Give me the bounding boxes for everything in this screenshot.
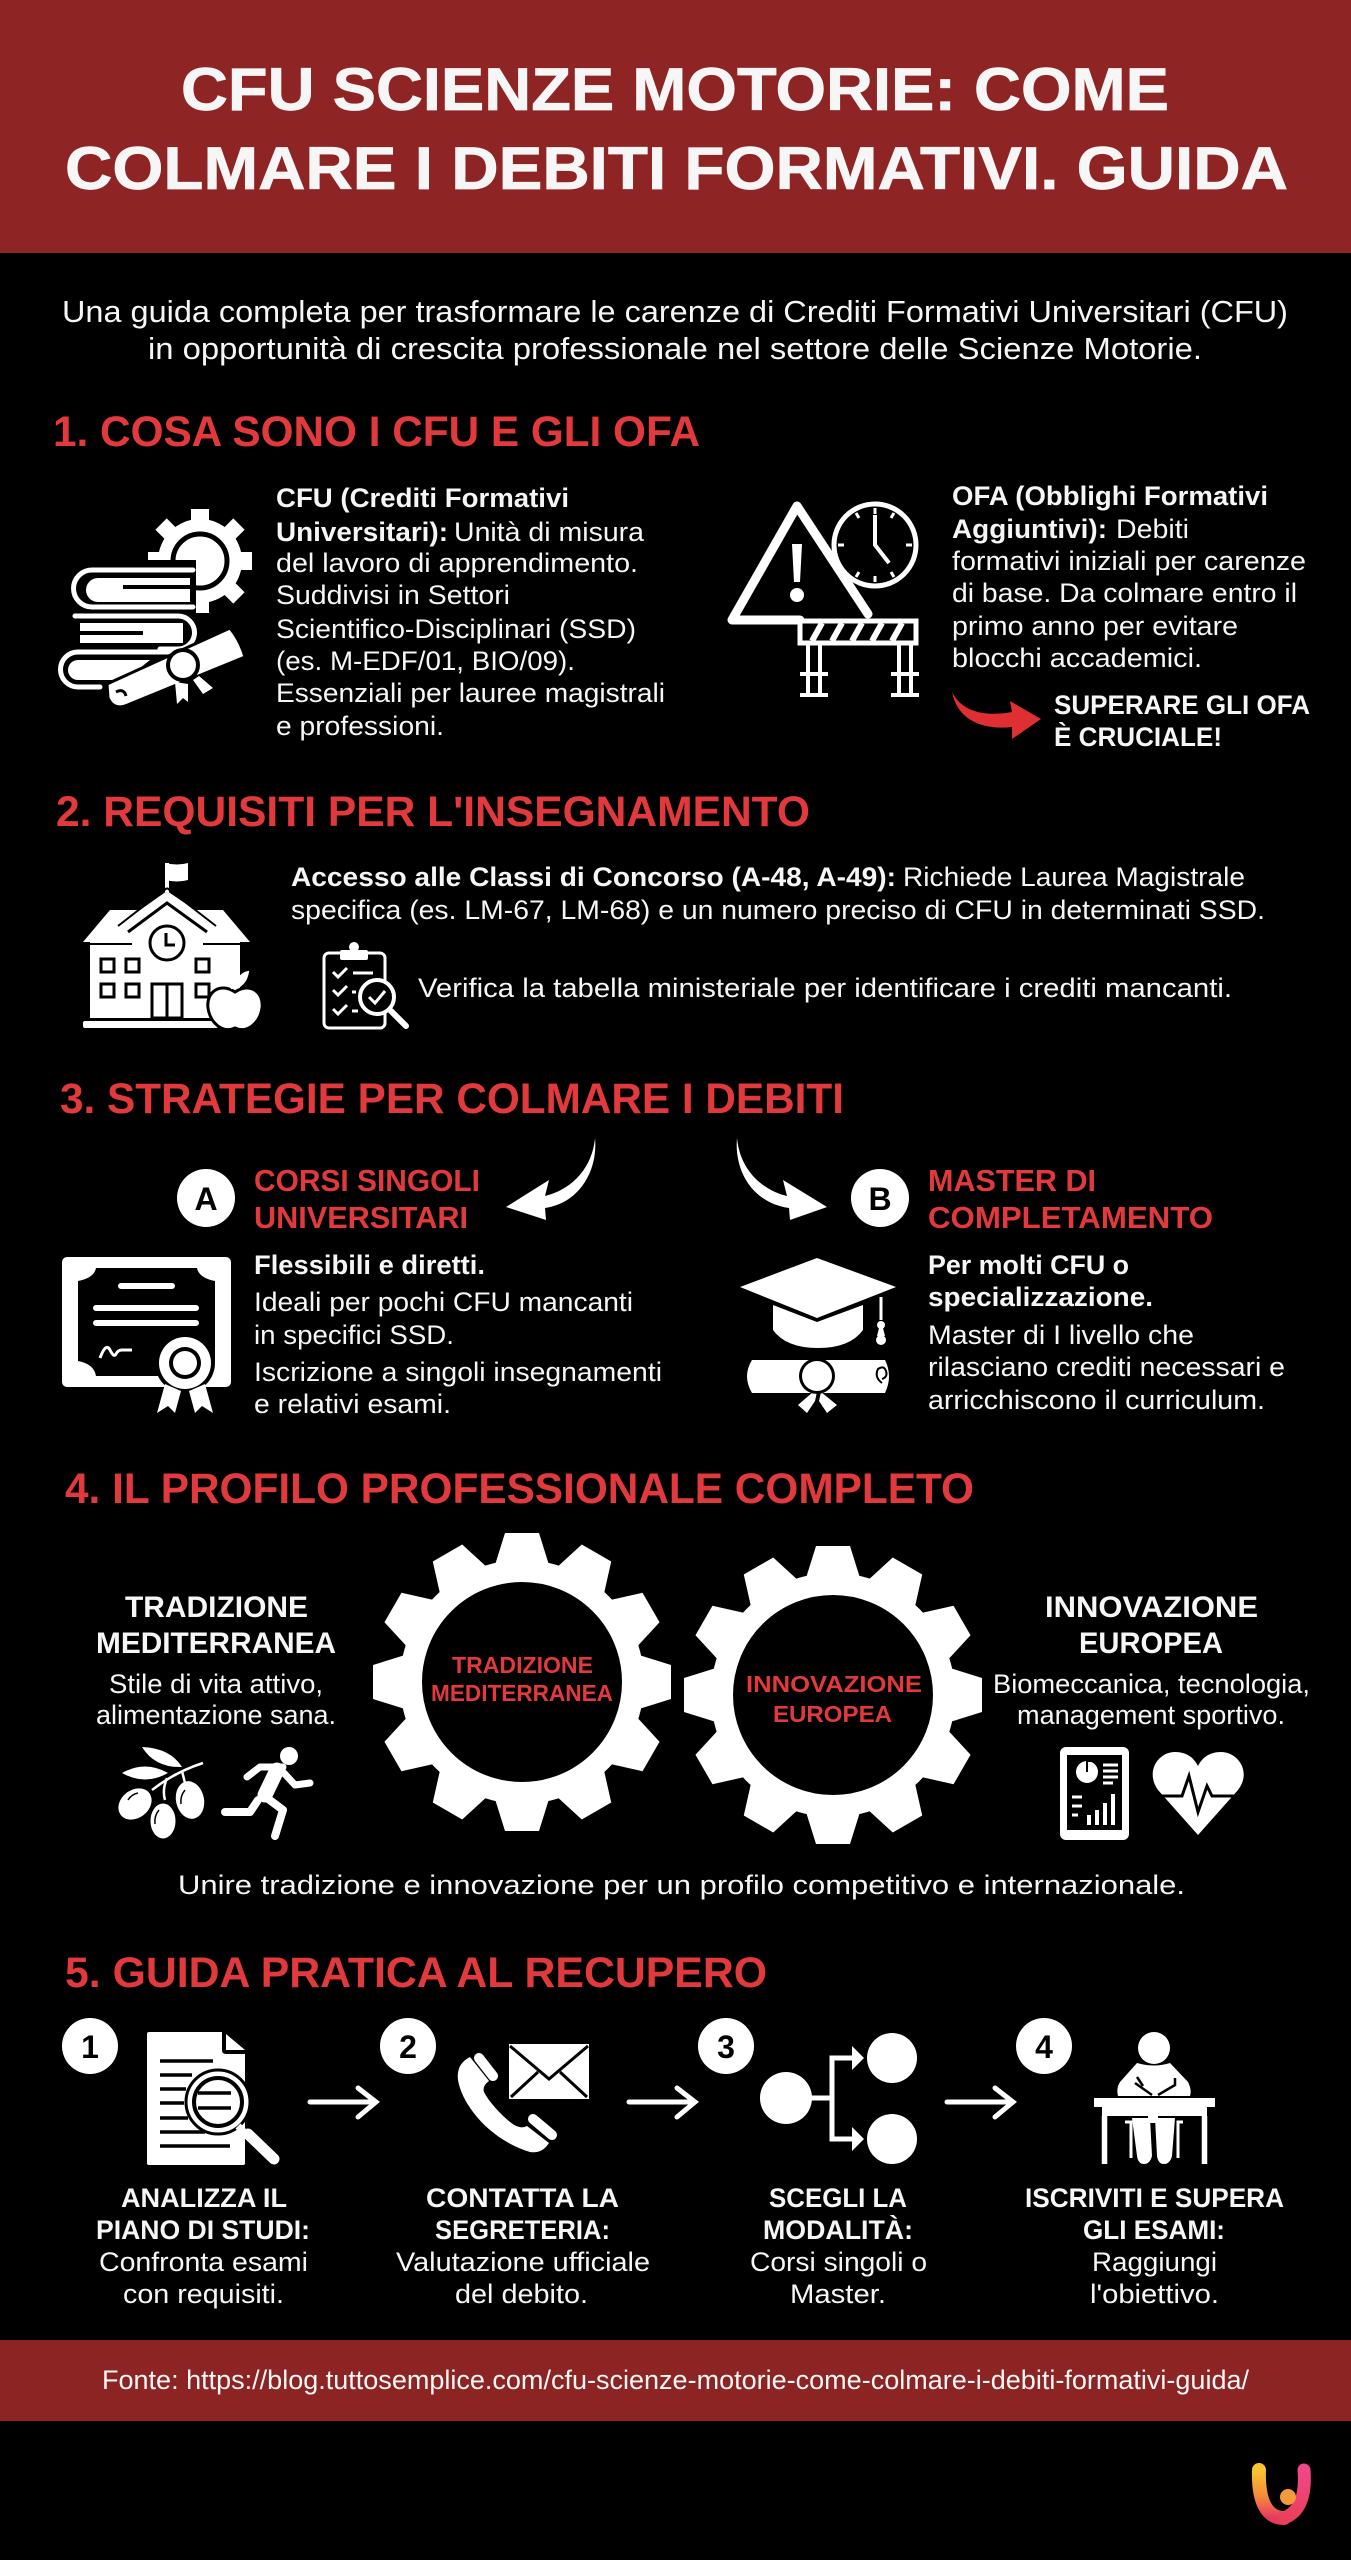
CFU text block [276,483,665,741]
step 1 text: PIANO DI STUDI: [96,2215,310,2245]
section 4 heading: 4. IL PROFILO PROFESSIONALE COMPLETO [65,1465,974,1513]
footer source banner [0,2340,1351,2421]
option B text: arricchiscono il curriculum. [928,1385,1265,1415]
innovation text: INNOVAZIONE [1045,1591,1258,1624]
arrow: to option A [506,1138,595,1220]
title [65,56,1288,202]
requirements text: Accesso alle Classi di Concorso (A-48, A-49): [291,862,896,892]
option B heading: B [868,1181,892,1217]
option A text: Iscrizione a singoli insegnamenti [254,1357,662,1387]
step 3 badge [698,2018,754,2074]
tradition text: alimentazione sana. [96,1700,336,1730]
OFA text block: primo anno per evitare [952,611,1238,641]
footer source banner: Fonte: https://blog.tuttosemplice.com/cfu-scienze-motorie-come-colmare-i-debiti-formativi-guida/ [102,2365,1249,2395]
step 3 badge: 3 [717,2029,735,2065]
CFU text block: CFU (Crediti Formativi [276,483,569,513]
step 2 text: CONTATTA LA [426,2183,619,2213]
CFU text block: Universitari): [276,517,448,547]
icon: branching choice [760,2033,917,2164]
innovation text: management sportivo. [1017,1700,1285,1730]
step 3 text [750,2183,927,2309]
step 3 text: SCEGLI LA [769,2183,907,2213]
CFU text block: e professioni. [276,711,444,741]
OFA text block [952,481,1306,673]
option B text [928,1250,1285,1415]
innovation text: EUROPEA [1079,1627,1223,1660]
option A text: Ideali per pochi CFU mancanti [254,1287,633,1317]
step 4 badge [1016,2018,1072,2074]
option A text [254,1250,662,1419]
step 1 badge: 1 [81,2029,99,2065]
option B text: Per molti CFU o [928,1250,1129,1280]
requirements text [291,862,1265,925]
arrow: step 2 to 3 [629,2088,695,2117]
header banner [0,0,1351,253]
icon: runner [225,1747,310,1836]
gear: innovazione: INNOVAZIONE [746,1671,922,1697]
step 1 badge [62,2018,118,2074]
icon: tablet with charts [1060,1747,1129,1840]
title: CFU SCIENZE MOTORIE: COME [181,56,1169,123]
tradition text: Stile di vita attivo, [109,1669,323,1699]
verification note: Verifica la tabella ministeriale per identificare i crediti mancanti. [418,973,1232,1003]
OFA text block: Aggiuntivi): [952,514,1107,544]
option A heading [177,1163,480,1235]
gear: innovazione [684,1546,982,1844]
section 3 heading: 3. STRATEGIE PER COLMARE I DEBITI [60,1075,844,1123]
step 2 badge: 2 [399,2029,417,2065]
step 4 badge: 4 [1035,2029,1053,2065]
requirements text: Richiede Laurea Magistrale [903,862,1245,892]
arrow: to option B [737,1138,827,1220]
gear: innovazione: EUROPEA [773,1701,892,1727]
innovation text [993,1591,1310,1730]
OFA text block: Debiti [1116,514,1189,544]
intro text [62,294,1288,366]
title: COLMARE I DEBITI FORMATIVI. GUIDA [65,135,1288,202]
step 4 text [1025,2183,1284,2309]
option B heading: COMPLETAMENTO [928,1200,1213,1235]
icon: warning, clock and barrier [732,504,919,695]
option A heading: UNIVERSITARI [254,1200,468,1235]
intro text: in opportunità di crescita professionale nel settore delle Scienze Motorie. [148,331,1202,366]
option A heading: A [194,1181,218,1217]
step 3 text: Corsi singoli o [750,2247,927,2277]
callout: superare gli OFA [1054,690,1310,752]
section 2 heading: 2. REQUISITI PER L'INSEGNAMENTO [56,788,810,836]
icon: checklist with magnifier [324,942,406,1028]
CFU text block: Unità di misura [454,517,645,547]
callout: superare gli OFA: SUPERARE GLI OFA [1054,690,1310,720]
requirements text: specifica (es. LM-67, LM-68) e un numero preciso di CFU in determinati SSD. [291,895,1265,925]
icon: olive branch [112,1747,208,1839]
step 1 text: Confronta esami [99,2247,308,2277]
option A heading: CORSI SINGOLI [254,1163,480,1198]
step 2 badge [380,2018,436,2074]
step 4 text: ISCRIVITI E SUPERA [1025,2183,1284,2213]
arrow: step 1 to 2 [310,2088,376,2117]
icon: school with apple [83,863,262,1030]
CFU text block: Scientifico-Disciplinari (SSD) [276,614,636,644]
logo [1259,2470,1304,2518]
icon: phone and envelope [458,2044,589,2152]
step 2 text: Valutazione ufficiale [396,2247,650,2277]
CFU text block: (es. M-EDF/01, BIO/09). [276,646,575,676]
OFA text block: di base. Da colmare entro il [952,578,1297,608]
option B text: rilasciano crediti necessari e [928,1352,1285,1382]
arrow: step 3 to 4 [947,2088,1013,2117]
CFU text block: del lavoro di apprendimento. [276,548,638,578]
icon: student at desk [1094,2032,1215,2164]
step 2 text: del debito. [455,2279,588,2309]
step 4 text: l'obiettivo. [1090,2279,1219,2309]
option A text: e relativi esami. [254,1389,451,1419]
summary sentence: Unire tradizione e innovazione per un profilo competitivo e internazionale. [178,1870,1185,1900]
option A text: in specifici SSD. [254,1320,454,1350]
option B text: specializzazione. [928,1282,1153,1312]
option B heading: MASTER DI [928,1163,1096,1198]
gear: tradizione [373,1533,671,1831]
OFA text block: formativi iniziali per carenze [952,546,1306,576]
gear: tradizione: TRADIZIONE [452,1652,593,1678]
CFU text block: Essenziali per lauree magistrali [276,678,665,708]
option A text: Flessibili e diretti. [254,1250,485,1280]
intro text: Una guida completa per trasformare le carenze di Crediti Formativi Universitari (CFU) [62,294,1288,329]
CFU text block: Suddivisi in Settori [276,580,510,610]
step 3 text: Master. [790,2279,886,2309]
step 2 text [396,2183,650,2309]
step 1 text: con requisiti. [123,2279,284,2309]
section 5 heading: 5. GUIDA PRATICA AL RECUPERO [65,1949,767,1997]
section 1 heading: 1. COSA SONO I CFU E GLI OFA [53,408,700,456]
icon: document with magnifier [147,2032,274,2165]
step 1 text [96,2183,310,2309]
OFA text block: OFA (Obblighi Formativi [952,481,1268,511]
step 2 text: SEGRETERIA: [435,2215,610,2245]
option B text: Master di I livello che [928,1320,1194,1350]
step 4 text: GLI ESAMI: [1083,2215,1225,2245]
tradition text: MEDITERRANEA [96,1627,336,1660]
icon: books, gear and diploma [60,509,252,707]
OFA text block: blocchi accademici. [952,643,1202,673]
option B heading [851,1163,1213,1235]
gear: tradizione: MEDITERRANEA [431,1680,613,1706]
arrow: red curved [952,692,1041,739]
innovation text: Biomeccanica, tecnologia, [993,1669,1310,1699]
step 4 text: Raggiungi [1092,2247,1217,2277]
icon: certificate [62,1257,231,1413]
step 3 text: MODALITÀ: [763,2214,913,2245]
icon: heart with pulse [1153,1752,1244,1835]
tradition text: TRADIZIONE [125,1591,308,1624]
callout: superare gli OFA: È CRUCIALE! [1054,721,1222,752]
icon: graduation cap and diploma [740,1258,896,1413]
tradition text [96,1591,336,1730]
step 1 text: ANALIZZA IL [121,2183,287,2213]
